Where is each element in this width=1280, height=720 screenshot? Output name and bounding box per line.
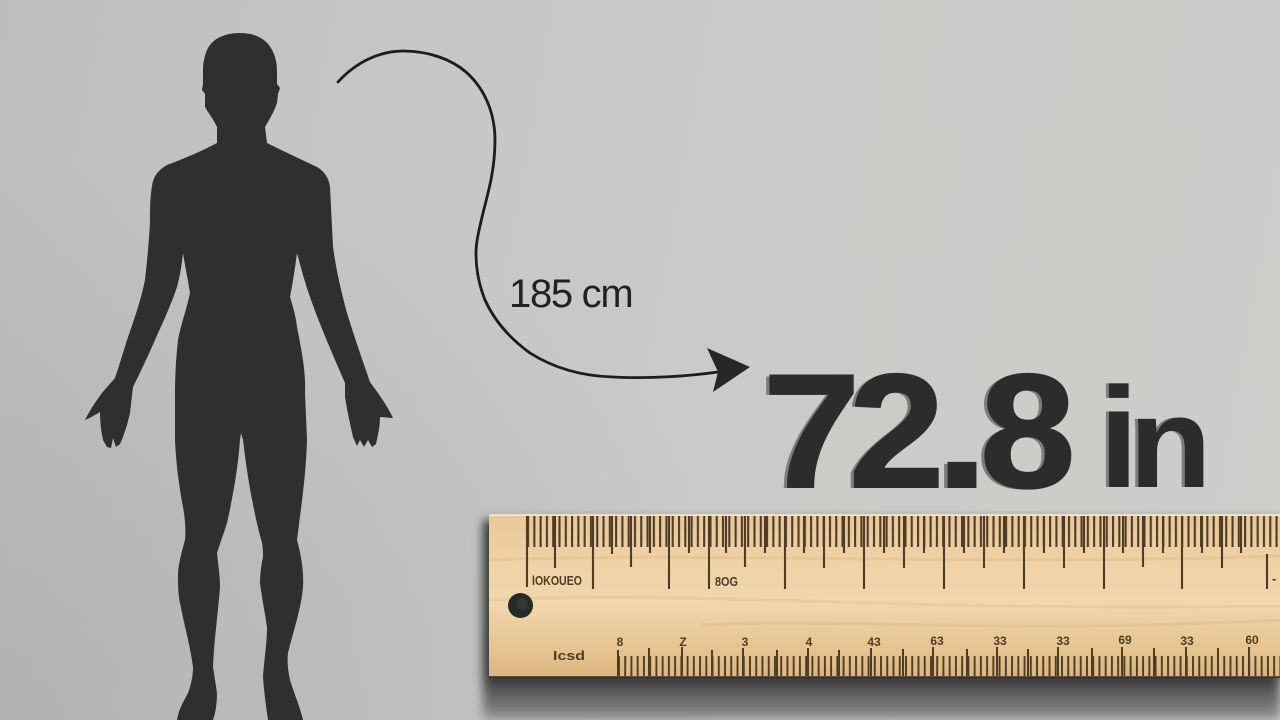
headline value: 72.8 in: 7 <box>763 341 860 522</box>
bottom scale labels: 8 <box>617 635 624 649</box>
bottom scale labels: 69 <box>1118 633 1132 647</box>
bottom scale labels <box>553 633 1259 663</box>
bottom scale labels: 60 <box>1245 633 1259 647</box>
headline value: 72.8 in <box>763 341 1212 522</box>
bottom scale labels: 33 <box>993 634 1007 648</box>
wooden body <box>489 515 1280 677</box>
hanging hole <box>508 593 533 618</box>
headline value: 72.8 in: 8 <box>980 341 1076 522</box>
bottom scale labels: 33 <box>1056 634 1070 648</box>
bottom scale ticks <box>618 647 1280 676</box>
top scale labels: lOKOUEO <box>532 573 582 588</box>
bottom scale labels: 4 <box>806 635 813 649</box>
headline value: 72.8 in: . <box>936 341 988 522</box>
bottom scale labels: 3 <box>742 635 749 649</box>
top scale labels: - <box>1272 571 1276 586</box>
headline value: 72.8 in: i <box>1099 359 1139 518</box>
curved arrow <box>338 51 750 392</box>
bottom scale labels: 63 <box>930 634 944 648</box>
headline value: 72.8 in: 2 <box>849 341 945 522</box>
ruler drop shadow <box>483 520 1280 720</box>
top scale labels: 8OG <box>715 574 738 589</box>
top scale labels <box>532 571 1276 589</box>
label: 185 cm: 185 cm <box>509 272 632 316</box>
human silhouette <box>85 33 393 720</box>
bottom scale labels: Z <box>679 635 687 649</box>
ruler <box>489 515 1280 677</box>
bottom scale labels: Icsd <box>553 648 585 663</box>
top scale ticks <box>527 516 1280 589</box>
headline value: 72.8 in: n <box>1129 371 1212 515</box>
bottom scale labels: 43 <box>867 635 881 649</box>
bottom scale labels: 33 <box>1180 634 1194 648</box>
